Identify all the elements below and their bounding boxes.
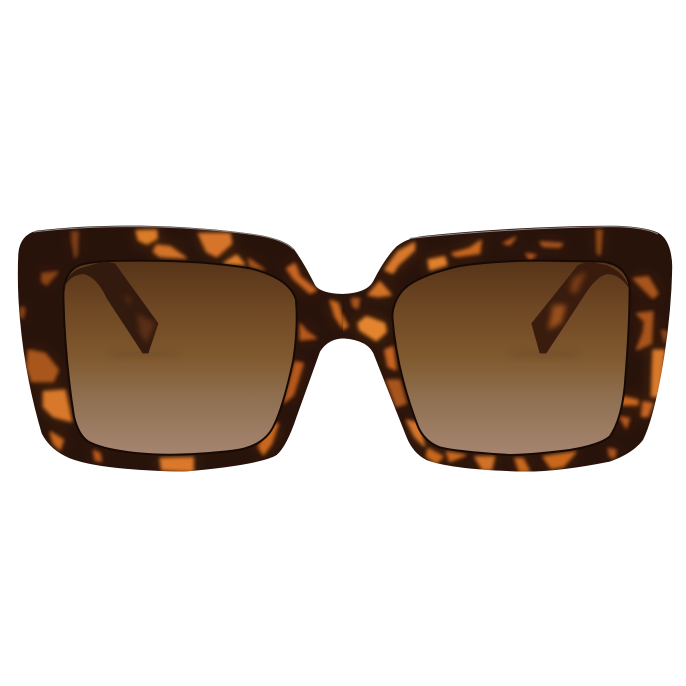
left frame bbox=[18, 226, 344, 472]
right frame bbox=[342, 226, 672, 472]
right lens bbox=[392, 261, 630, 455]
right frame top highlight bbox=[410, 227, 658, 238]
left half of the glasses bbox=[18, 226, 344, 472]
illustration: tortoiseshell sunglasses bbox=[18, 226, 672, 472]
left lens bbox=[63, 261, 297, 455]
right temple arm seen through lens bbox=[531, 262, 630, 354]
right frame tortoiseshell blotches bbox=[341, 230, 668, 472]
left frame tortoiseshell blotches bbox=[20, 230, 343, 472]
left temple arm seen through lens bbox=[64, 262, 158, 354]
right half of the glasses bbox=[342, 226, 672, 472]
left frame top highlight bbox=[33, 227, 293, 249]
